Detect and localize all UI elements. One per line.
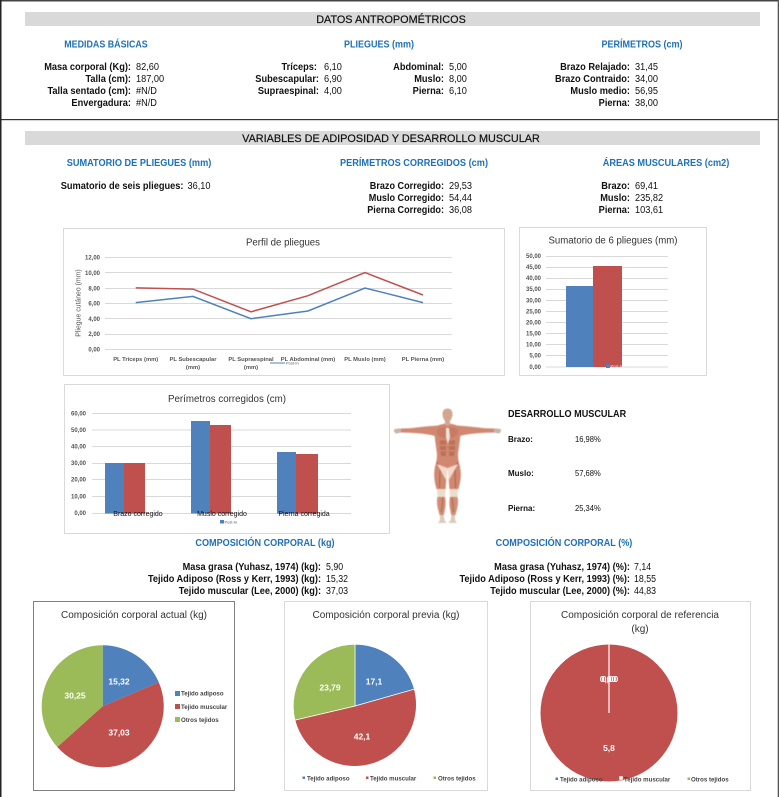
text block: perímetros corregidos: Brazo Corregido: [370, 181, 444, 192]
text block: composición corporal kg: 5,90 [326, 560, 343, 572]
text block: pliegues: 5,00 [449, 62, 467, 73]
bar chart: perímetros corregidos: Muslo corregido [197, 511, 247, 518]
text block: composición corporal porcentaje: Tejido Adiposo (Ross y Kerr, 1993) (%): [460, 574, 630, 585]
panel: variables de adiposidad y desarrollo muscular [25, 131, 760, 216]
text block: pliegues: 6,10 [449, 86, 467, 97]
bar chart: perímetros corregidos [64, 384, 390, 534]
bar chart: sumatorio de 6 pliegues: 20,00 [526, 320, 542, 326]
text block: perímetros: PERÍMETROS (cm) [602, 39, 682, 51]
pie chart: composición corporal actual [34, 602, 234, 790]
line chart: perfil de pliegues: PL Supraespinal [228, 357, 274, 363]
pie chart: composición corporal de referencia: 0,00 [602, 674, 619, 684]
line chart: perfil de pliegues: 10,00 [85, 271, 101, 277]
pie chart: composición corporal actual: Composición corporal actual (kg) [61, 610, 207, 621]
bar chart: sumatorio de 6 pliegues: 10,00 [526, 342, 542, 348]
bar chart: sumatorio de 6 pliegues [520, 228, 706, 376]
bar chart: sumatorio de 6 pliegues: Post-In [610, 364, 623, 368]
pie chart: composición corporal previa: 17,1 [366, 676, 383, 686]
text block: pliegues: 6,10 [324, 62, 342, 73]
bar chart: sumatorio de 6 pliegues: 15,00 [526, 332, 542, 338]
text block: pliegues: Tríceps: [282, 62, 317, 73]
text block: composición corporal kg: 15,32 [326, 572, 348, 584]
bar chart: sumatorio de 6 pliegues: 35,00 [526, 287, 542, 293]
text block: medidas básicas: #N/D [136, 86, 157, 97]
text block: perímetros: Brazo Relajado: [560, 62, 630, 73]
text block: medidas básicas [44, 39, 164, 109]
pie chart: composición corporal de referencia: Composición corporal de referencia [561, 610, 719, 621]
text block: desarrollo muscular: DESARROLLO MUSCULAR [508, 409, 626, 420]
text block: desarrollo muscular: 57,68% [575, 469, 601, 478]
line chart: perfil de pliegues: PL Subescapular [170, 357, 217, 363]
text block: composición corporal kg: COMPOSICIÓN CORPORAL (kg) [195, 537, 335, 549]
bar chart: sumatorio de 6 pliegues: 45,00 [526, 265, 542, 271]
bar chart: perímetros corregidos: 20,00 [71, 478, 87, 484]
text block: perímetros: Brazo Contraido: [555, 74, 630, 85]
bar chart: perímetros corregidos: 0,00 [74, 511, 87, 517]
pie chart: composición corporal actual: 15,32 [108, 676, 130, 686]
bar chart: sumatorio de 6 pliegues: Sumatorio de 6 pliegues (mm) [548, 236, 678, 246]
text block: sumatorio de pliegues: Sumatorio de seis pliegues: [61, 181, 184, 192]
text block: composición corporal porcentaje: Tejido muscular (Lee, 2000) (%): [490, 586, 630, 597]
text block: perímetros corregidos: PERÍMETROS CORREGIDOS (cm) [340, 157, 488, 169]
line chart: perfil de pliegues: PL Pierna (mm) [402, 357, 444, 363]
text block: composición corporal kg: Tejido Adiposo (Ross y Kerr, 1993) (kg): [148, 574, 321, 585]
pie chart: composición corporal actual: 37,03 [108, 728, 130, 738]
text block: desarrollo muscular: Brazo: [508, 435, 533, 444]
pie chart: composición corporal actual: Tejido adiposo [181, 690, 224, 698]
text block: medidas básicas: Talla sentado (cm): [47, 86, 131, 97]
text block: desarrollo muscular: Pierna: [508, 504, 535, 513]
line chart: perfil de pliegues: PL Tríceps (mm) [113, 357, 158, 363]
line chart: perfil de pliegues: (mm) [244, 365, 258, 371]
line chart: perfil de pliegues: 8,00 [88, 286, 101, 292]
text block: medidas básicas: 187,00 [136, 74, 164, 85]
text block: desarrollo muscular: 16,98% [575, 435, 601, 444]
heading: variables de adiposidad: VARIABLES DE ADIPOSIDAD Y DESARROLLO MUSCULAR [242, 133, 540, 145]
bar chart: sumatorio de 6 pliegues: 5,00 [529, 354, 542, 360]
text block: sumatorio de pliegues: SUMATORIO DE PLIEGUES (mm) [67, 158, 211, 169]
text block: perímetros: Pierna: [599, 98, 630, 109]
text block: perímetros: 56,95 [635, 86, 658, 97]
bar chart: perímetros corregidos: Perímetros corregidos (cm) [168, 394, 286, 405]
pie chart: composición corporal de referencia: 5,8 [603, 743, 615, 753]
text block: composición corporal kg: Masa grasa (Yuhasz, 1974) (kg): [183, 562, 321, 573]
text block: perímetros: Muslo medio: [570, 86, 630, 97]
pie chart: composición corporal de referencia: Tejido adiposo [560, 776, 603, 784]
pie chart: composición corporal de referencia: 0,00 [600, 674, 617, 684]
pie chart: composición corporal de referencia: Tejido muscular [624, 776, 671, 784]
text block: composición corporal porcentaje: 18,55 [634, 572, 656, 584]
bar chart: sumatorio de 6 pliegues: 30,00 [526, 298, 542, 304]
text block: sumatorio de pliegues: 36,10 [188, 181, 210, 192]
text block: medidas básicas: 82,60 [136, 62, 159, 73]
text block: medidas básicas: #N/D [136, 98, 157, 109]
text block: medidas básicas: Envergadura: [71, 98, 131, 109]
pie chart: composición corporal de referencia: Otros tejidos [691, 776, 729, 784]
text block: pliegues: 6,90 [324, 74, 342, 85]
text block: pliegues: Supraespinal: [258, 86, 319, 97]
text block: perímetros corregidos: Muslo Corregido: [369, 193, 444, 204]
bar chart: perímetros corregidos: Brazo corregido [113, 511, 163, 518]
text block: composición corporal porcentaje: Masa grasa (Yuhasz, 1974) (%): [494, 562, 630, 573]
text block: áreas musculares: 235,82 [635, 193, 663, 204]
pie chart: composición corporal previa: 23,79 [319, 682, 341, 692]
line chart: perfil de pliegues: 4,00 [88, 317, 101, 323]
bar chart: sumatorio de 6 pliegues: 40,00 [526, 276, 542, 282]
heading: datos antropométricos [25, 12, 760, 26]
line chart: perfil de pliegues: 2,00 [88, 332, 101, 338]
bar chart: perímetros corregidos: Pierna corregida [278, 511, 330, 518]
text block: perímetros corregidos: 29,53 [449, 181, 472, 192]
line chart: perfil de pliegues: 0,00 [88, 348, 101, 354]
text block: áreas musculares: 103,61 [635, 205, 663, 216]
text block: perímetros corregidos: Pierna Corregido: [367, 205, 444, 216]
text block: pliegues: 4,00 [324, 86, 342, 97]
text block: composición corporal kg: Tejido muscular (Lee, 2000) (kg): [179, 586, 321, 597]
pie chart: composición corporal previa: Tejido adiposo [307, 776, 350, 782]
bar chart: perímetros corregidos: 40,00 [71, 444, 87, 450]
text block: composición corporal kg [148, 537, 348, 597]
text block: áreas musculares: ÁREAS MUSCULARES (cm2) [603, 157, 729, 169]
text block: pliegues: Pierna: [413, 86, 444, 97]
text block: desarrollo muscular [508, 409, 626, 513]
panel: datos antropométricos [25, 12, 760, 109]
text block: perímetros: 34,00 [635, 74, 658, 85]
text block: medidas básicas: Masa corporal (Kg): [44, 62, 131, 73]
pie chart: composición corporal previa: Otros tejidos [438, 776, 476, 782]
text block: pliegues: Muslo: [414, 74, 444, 85]
bar chart: sumatorio de 6 pliegues: 50,00 [526, 254, 542, 260]
bar chart: perímetros corregidos: 50,00 [71, 428, 87, 434]
text block: pliegues: Subescapular: [255, 74, 319, 85]
text block: composición corporal porcentaje [460, 537, 656, 597]
text block: pliegues: 8,00 [449, 74, 467, 85]
pie chart: composición corporal previa: 42,1 [354, 732, 371, 742]
text block: perímetros: 31,45 [635, 62, 658, 73]
bar chart: perímetros corregidos: 10,00 [71, 494, 87, 500]
text block: áreas musculares: Muslo: [600, 193, 630, 204]
line chart: perfil de pliegues: PL Muslo (mm) [344, 357, 386, 363]
pie chart: composición corporal previa: Composición corporal previa (kg) [312, 610, 460, 621]
line chart: perfil de pliegues [64, 228, 504, 376]
bar chart: perímetros corregidos: 30,00 [71, 461, 87, 467]
text block: perímetros corregidos: 36,08 [449, 205, 472, 216]
text block: áreas musculares: 69,41 [635, 181, 658, 192]
line chart: perfil de pliegues: (mm) [186, 365, 200, 371]
line chart: perfil de pliegues: Perfil de pliegues [246, 238, 320, 248]
text block: composición corporal porcentaje: 7,14 [634, 560, 651, 572]
pie chart: composición corporal previa [284, 602, 488, 790]
text block: pliegues [255, 39, 467, 97]
text block: perímetros corregidos [340, 157, 488, 216]
pie chart: composición corporal actual: Otros tejidos [181, 717, 219, 724]
line chart: perfil de pliegues: 12,00 [85, 256, 101, 262]
line chart: perfil de pliegues: Pliegue cutáneo (mm) [76, 269, 82, 337]
bar chart: sumatorio de 6 pliegues: 25,00 [526, 310, 542, 316]
text block: perímetros [555, 39, 682, 109]
pie chart: composición corporal actual: Tejido muscular [181, 704, 228, 711]
pie chart: composición corporal actual: 30,25 [64, 690, 86, 700]
text block: composición corporal porcentaje: 44,83 [634, 584, 656, 596]
text block: desarrollo muscular: 25,34% [575, 504, 601, 513]
bar chart: perímetros corregidos: 60,00 [71, 412, 87, 418]
text block: sumatorio de pliegues [61, 158, 211, 192]
pie chart: composición corporal de referencia: (kg) [631, 624, 649, 635]
text block: pliegues: PLIEGUES (mm) [344, 39, 414, 51]
heading: variables de adiposidad [25, 131, 760, 145]
bar chart: perímetros corregidos: Post-In [224, 520, 237, 524]
text block: composición corporal porcentaje: COMPOSICIÓN CORPORAL (%) [496, 537, 632, 549]
text block: composición corporal kg: 37,03 [326, 584, 348, 596]
text block: medidas básicas: Talla (cm): [85, 74, 131, 85]
line chart: perfil de pliegues: Post-In [286, 360, 299, 366]
icon: anatomical muscular figure [394, 408, 501, 523]
text block: pliegues: Abdominal: [393, 62, 444, 73]
text block: desarrollo muscular: Muslo: [508, 469, 534, 478]
text block: áreas musculares [599, 157, 729, 216]
text block: áreas musculares: Brazo: [601, 181, 630, 192]
text block: perímetros corregidos: 54,44 [449, 193, 473, 204]
text block: medidas básicas: MEDIDAS BÁSICAS [64, 39, 148, 51]
pie chart: composición corporal de referencia [530, 602, 750, 790]
line chart: perfil de pliegues: PL Abdominal (mm) [281, 357, 335, 363]
text block: perímetros: 38,00 [635, 98, 658, 109]
pie chart: composición corporal previa: Tejido muscular [370, 776, 417, 782]
bar chart: sumatorio de 6 pliegues: 0,00 [529, 365, 542, 371]
heading: datos antropométricos: DATOS ANTROPOMÉTRICOS [316, 13, 466, 26]
line chart: perfil de pliegues: 6,00 [88, 302, 101, 308]
text block: áreas musculares: Pierna: [599, 205, 630, 216]
